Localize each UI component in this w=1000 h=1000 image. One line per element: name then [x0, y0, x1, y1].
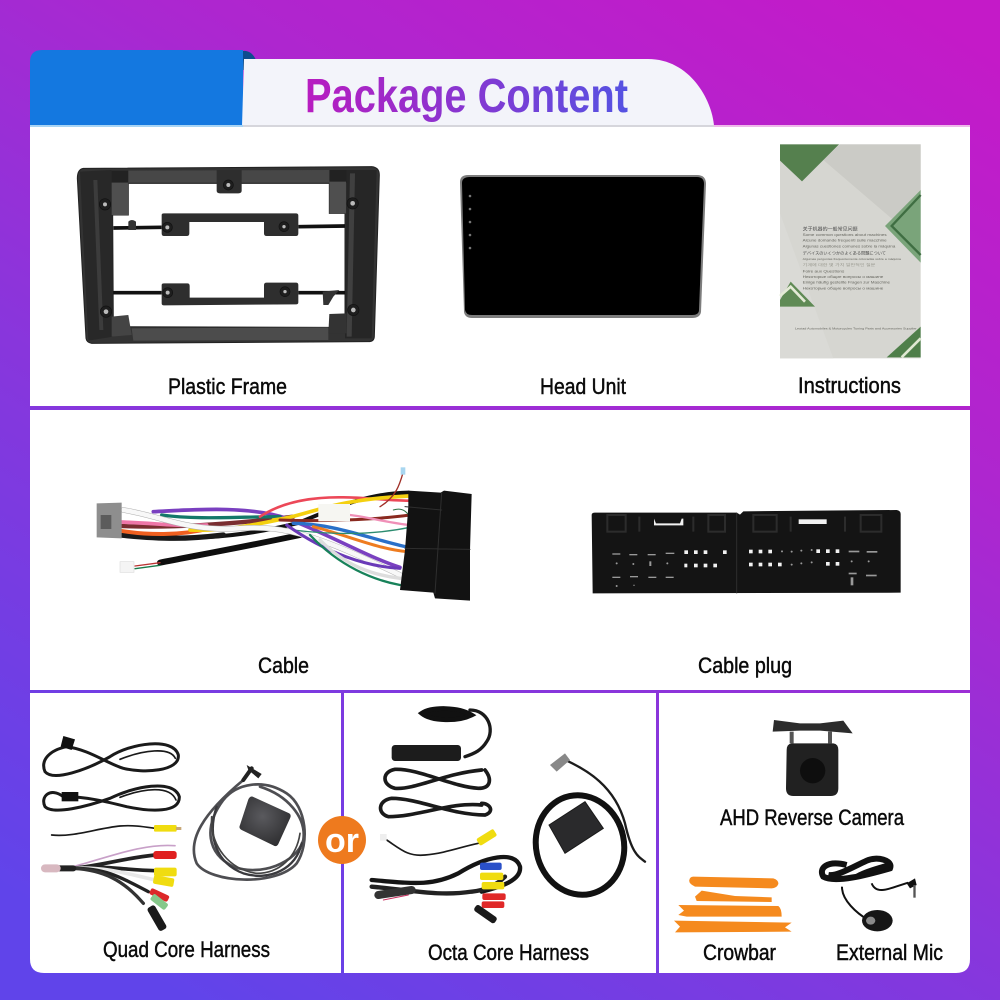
- sub-part: USB loop two: [381, 798, 491, 817]
- sub-part: USB cable one: [44, 736, 178, 775]
- label: Instructions: Instructions: [798, 373, 901, 398]
- icon: instructions booklet: Некоторые общие вопросы о машине: [803, 287, 883, 291]
- icon: orange crowbar tools: [674, 877, 792, 932]
- label: AHD Reverse Camera: AHD Reverse Camera: [720, 805, 905, 830]
- icon: head unit: [460, 175, 706, 318]
- icon: instructions booklet: Foire aux Questions: [803, 269, 845, 273]
- icon: instructions booklet: [780, 144, 921, 358]
- panel: quad core harness: [30, 693, 341, 973]
- sub-part: USB loop one: [385, 769, 489, 788]
- sub-part: stick antenna: [392, 709, 490, 761]
- label: Cable plug: Cable plug: [698, 653, 792, 678]
- icon: instructions booklet: 기계에 대한 몇 가지 일반적인 질문: [803, 262, 876, 267]
- panel: cable and cable plug: [30, 410, 970, 690]
- badge: or: [318, 816, 366, 864]
- title: Package Content: [305, 70, 628, 123]
- sub-part: yellow RCA cable: [380, 829, 497, 855]
- panel: camera, crowbar, mic: [659, 693, 970, 973]
- label: Octa Core Harness: Octa Core Harness: [428, 940, 589, 965]
- icon: wiring cable: [97, 467, 472, 601]
- sub-part: RCA harness bundle: [372, 857, 520, 924]
- sub-part: yellow RCA cable: [52, 825, 181, 835]
- sub-part: RCA harness bundle: [45, 845, 177, 932]
- panel: plastic frame, head unit, instructions: [30, 125, 970, 406]
- sub-part: black connector: [400, 491, 472, 601]
- sub-part: GPS antenna: [194, 765, 305, 880]
- sub-part: grey connector: [97, 503, 122, 538]
- icon: plastic frame: [77, 167, 379, 343]
- label: Head Unit: Head Unit: [540, 374, 626, 399]
- sub-part: USB cable two: [44, 786, 179, 810]
- title tab with heading: [242, 59, 714, 126]
- icon: quad core harness parts: [44, 736, 305, 932]
- icon: AHD reverse camera: [773, 720, 853, 796]
- icon: instructions booklet: Algunas cuestiones comunes sobre la máquina: [803, 245, 896, 249]
- icon: instructions booklet: デバイスのいくつかのよくある問題について: [803, 249, 886, 255]
- label: Crowbar: Crowbar: [703, 940, 776, 965]
- icon: cable plug: [592, 510, 901, 593]
- label: External Mic: External Mic: [836, 940, 943, 965]
- icon: external microphone: [822, 859, 917, 931]
- sub-part: GPS antenna: [527, 753, 645, 903]
- panel: octa core harness: [344, 693, 656, 973]
- icon: instructions booklet: Einige häufig gestellte Fragen zur Maschine: [803, 281, 890, 285]
- blue header tab: [30, 50, 257, 125]
- icon: instructions booklet: 关于机器的一般常见问题: [803, 226, 858, 233]
- icon: instructions booklet: Algumas perguntas frequentemente colocadas sobre a máquina: [803, 257, 901, 261]
- label: Plastic Frame: Plastic Frame: [168, 374, 287, 399]
- label: Cable: Cable: [258, 653, 309, 678]
- icon: octa core harness parts: [372, 709, 645, 924]
- badge: or: or: [325, 822, 359, 860]
- label: Quad Core Harness: Quad Core Harness: [103, 937, 270, 962]
- icon: instructions booklet: Некоторые общие вопросы о машине: [803, 275, 883, 279]
- icon: instructions booklet: Leotad Automobiles & Motorcycles Tuning Parts and Accessories Supplier: [795, 326, 917, 330]
- icon: instructions booklet: Some common questions about machines: [803, 233, 887, 237]
- icon: instructions booklet: Alcune domande frequenti sulle macchine: [803, 239, 887, 243]
